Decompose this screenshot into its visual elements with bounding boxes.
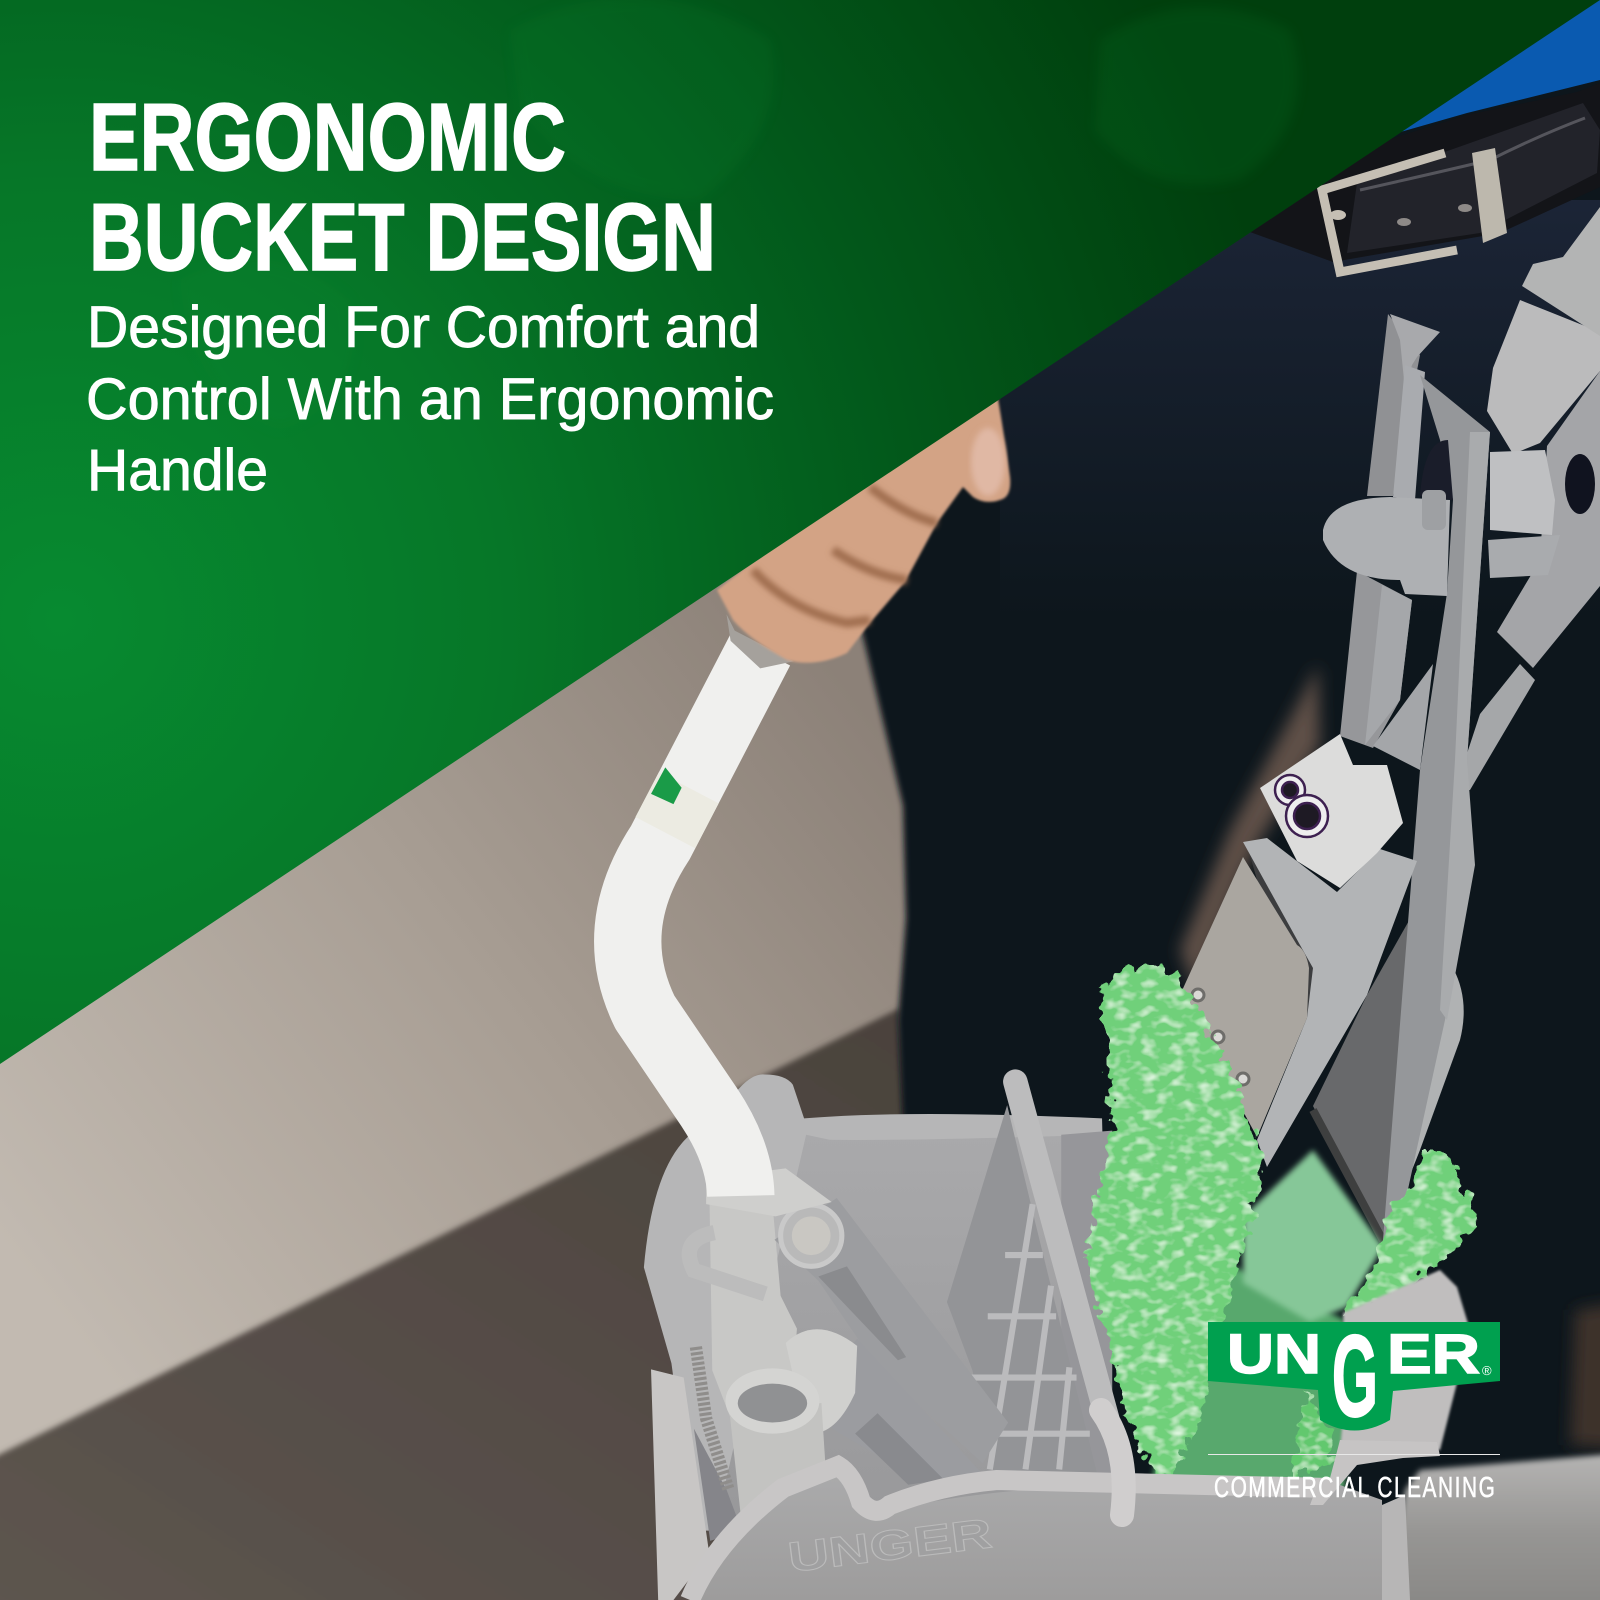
buckle prong xyxy=(1330,210,1346,220)
lower tube opening xyxy=(726,1368,819,1434)
title line 2: BUCKET DESIGN xyxy=(89,184,716,291)
hub post xyxy=(1422,490,1446,530)
trousers upper sheen xyxy=(1000,200,1600,620)
wringer mechanism xyxy=(651,1168,1008,1600)
sticker logo xyxy=(651,767,682,804)
clip teeth icon xyxy=(1275,775,1328,837)
lower mouth xyxy=(1286,795,1328,837)
buckle frame xyxy=(1322,153,1457,272)
microfiber pad xyxy=(1087,960,1477,1490)
logo wordmark right: ER xyxy=(1387,1322,1480,1385)
translucent cloth xyxy=(1243,1150,1383,1322)
logo divider xyxy=(1208,1454,1500,1455)
belt stitching highlight xyxy=(1360,118,1585,190)
subtitle line 1: Designed For Comfort and xyxy=(87,295,760,360)
title xyxy=(89,84,716,291)
fin lines xyxy=(969,1204,1090,1469)
mop frame xyxy=(1180,207,1600,1250)
handle sticker band xyxy=(665,788,689,833)
rim hook xyxy=(1101,1410,1124,1515)
fingers xyxy=(717,380,1010,663)
grate rib xyxy=(1015,1082,1107,1418)
joint base xyxy=(1488,535,1560,578)
lower arm xyxy=(832,1339,986,1485)
joint cylinder xyxy=(1490,450,1555,535)
upper arm xyxy=(774,1198,1008,1463)
rim right corner xyxy=(1310,1440,1440,1505)
grate fins xyxy=(947,1105,1097,1473)
subtitle line 3: Handle xyxy=(87,438,268,503)
bucket front panel xyxy=(690,1467,1382,1600)
ergonomic handle xyxy=(628,614,794,1196)
bucket right interior xyxy=(1061,1131,1112,1531)
belt xyxy=(1250,83,1600,272)
vertical tube xyxy=(709,1181,797,1429)
belt front strap xyxy=(1347,103,1600,253)
fin body xyxy=(947,1105,1097,1473)
bucket interior xyxy=(714,1135,1100,1531)
rear shell xyxy=(1400,960,1464,1200)
right bracket plate xyxy=(1497,371,1600,668)
lower strut light side xyxy=(1365,585,1412,745)
upper strut xyxy=(1367,314,1420,496)
lower mouth center xyxy=(1294,803,1320,829)
pad right upper xyxy=(1343,1150,1477,1317)
blurred wall at right xyxy=(1570,1300,1600,1450)
pad left xyxy=(1087,960,1263,1475)
cloth lower fill xyxy=(1150,1250,1345,1490)
hub disc xyxy=(1323,497,1450,596)
panel glow shapes xyxy=(180,0,1298,430)
floor xyxy=(0,1008,960,1600)
strut head xyxy=(1390,314,1440,390)
collar xyxy=(706,1168,832,1216)
silver base plate xyxy=(1180,857,1309,1137)
title line 1: ERGONOMIC xyxy=(89,84,566,191)
subtitle line 2: Control With an Ergonomic xyxy=(86,367,774,432)
left post xyxy=(651,1369,709,1600)
handle tube xyxy=(628,650,760,1196)
bucket back wall xyxy=(644,1074,1112,1531)
photo: bucket and handle xyxy=(628,614,1112,1600)
subtitle xyxy=(86,295,774,503)
embossed bucket logo: UNGER xyxy=(785,1509,995,1581)
green diagonal panel xyxy=(0,0,1600,1064)
handle tube xyxy=(1487,300,1600,454)
dark squeegee panel xyxy=(1313,910,1415,1248)
logo tagline: COMMERCIAL CLEANING xyxy=(1214,1472,1495,1504)
upper arm slot xyxy=(818,1266,906,1360)
bucket front rim xyxy=(690,1466,1330,1600)
hand xyxy=(717,380,1010,663)
bucket right inner wall xyxy=(1340,1270,1470,1450)
wall gap between legs xyxy=(1180,665,1320,990)
dark holder gap xyxy=(1247,845,1322,1030)
registered mark: ® xyxy=(1482,1363,1492,1378)
main plate xyxy=(1383,375,1490,1250)
small triangular brace xyxy=(1373,664,1433,770)
pad holder xyxy=(1243,838,1417,1167)
logo: Unger commercial cleaning xyxy=(1208,1311,1500,1504)
logo tall G: G xyxy=(1332,1311,1378,1441)
photo background: wall and floor xyxy=(0,480,1000,1600)
pivot bolt xyxy=(781,1205,842,1266)
lower bracket strip xyxy=(1455,664,1535,790)
elbow xyxy=(786,1329,857,1434)
blue shirt xyxy=(1397,0,1600,133)
belt keeper xyxy=(1472,148,1507,243)
bucket lower right xyxy=(1380,1450,1600,1600)
bracket arch hole xyxy=(1565,454,1595,514)
pad right lower xyxy=(1293,1393,1333,1477)
plate arch hole xyxy=(1420,440,1453,500)
upper mouth center xyxy=(1282,782,1298,798)
handle collar xyxy=(1522,207,1600,336)
finger creases xyxy=(753,487,937,623)
strut light strip xyxy=(1393,365,1425,500)
grip collar xyxy=(727,614,794,668)
upper mouth xyxy=(1275,775,1305,805)
lower arm slot xyxy=(855,1413,944,1485)
bucket side lip xyxy=(1380,1495,1410,1600)
logo wordmark left: UN xyxy=(1227,1322,1321,1385)
logo banner xyxy=(1208,1322,1500,1430)
plate screw holes xyxy=(1192,989,1249,1085)
tube bore xyxy=(738,1384,807,1422)
white clip xyxy=(1260,734,1403,888)
belt holes xyxy=(1397,204,1472,226)
wall xyxy=(0,480,1000,1600)
belt back strap xyxy=(1250,83,1600,262)
squeegee edge xyxy=(1313,1110,1387,1248)
thumb tip xyxy=(971,428,1005,496)
trousers xyxy=(800,60,1600,1600)
spring shadow panel xyxy=(694,1429,742,1541)
lower strut xyxy=(1340,571,1412,748)
spring xyxy=(696,1347,729,1490)
clamp ring xyxy=(689,1233,765,1294)
lower tube xyxy=(729,1403,826,1526)
pivot bolt head xyxy=(792,1216,831,1255)
plate flange xyxy=(1440,432,1490,1020)
